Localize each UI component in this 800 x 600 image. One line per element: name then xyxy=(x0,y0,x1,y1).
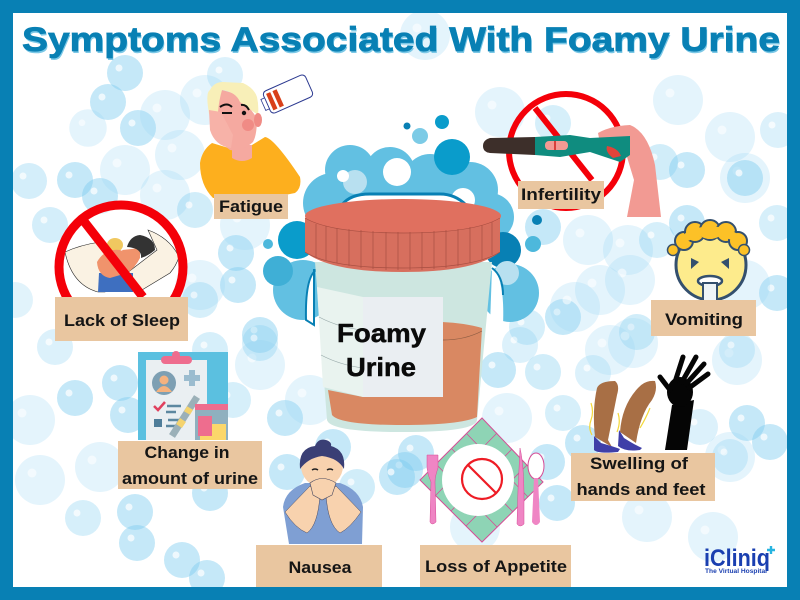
label: Fatigue xyxy=(214,194,288,219)
label: Infertility: Infertility xyxy=(521,185,602,204)
icon: vomiting face xyxy=(668,220,750,303)
title: Symptoms Associated With Foamy Urine xyxy=(22,21,780,59)
jar label text: Foamy xyxy=(337,318,427,348)
icon: low battery xyxy=(258,74,314,116)
label: Fatigue: Fatigue xyxy=(219,197,283,216)
label: Vomiting xyxy=(651,300,756,336)
label: Change in amount of urine xyxy=(118,441,262,489)
icon: foam bubbles behind jar xyxy=(263,115,542,325)
logo: iCliniq: The Virtual Hospital xyxy=(705,568,767,575)
label: Change in amount of urine: amount of urine xyxy=(122,469,258,488)
label: Infertility xyxy=(518,181,604,209)
label: Loss of Appetite: Loss of Appetite xyxy=(425,557,567,576)
label: Lack of Sleep xyxy=(55,297,188,341)
label: Nausea xyxy=(256,545,382,587)
jar label text xyxy=(337,318,427,382)
label: Lack of Sleep: Lack of Sleep xyxy=(64,311,180,330)
icon: pregnancy test with no sign xyxy=(483,94,661,217)
icon: urine report clipboard xyxy=(138,351,228,440)
jar label text: Urine xyxy=(346,352,416,382)
label: Swelling of hands and feet: hands and feet xyxy=(576,480,706,499)
icon: plate with no-eating sign xyxy=(420,418,544,542)
icon: urine sample jar xyxy=(305,199,501,432)
label: Swelling of hands and feet xyxy=(571,453,715,501)
logo: iCliniq: iCliniq xyxy=(704,545,770,572)
icon: nauseous person xyxy=(283,440,363,544)
title: Symptoms Associated With Foamy Urine xyxy=(23,23,781,61)
icon: no sleep sign xyxy=(59,205,183,329)
label: Swelling of hands and feet: Swelling of xyxy=(590,454,688,473)
label: Change in amount of urine: Change in xyxy=(144,443,230,462)
label: Loss of Appetite xyxy=(420,545,571,587)
label: Nausea: Nausea xyxy=(288,558,352,577)
icon: tired person with low battery xyxy=(200,74,314,199)
icon: swollen legs and hand xyxy=(590,357,708,453)
label: Vomiting: Vomiting xyxy=(665,310,743,329)
